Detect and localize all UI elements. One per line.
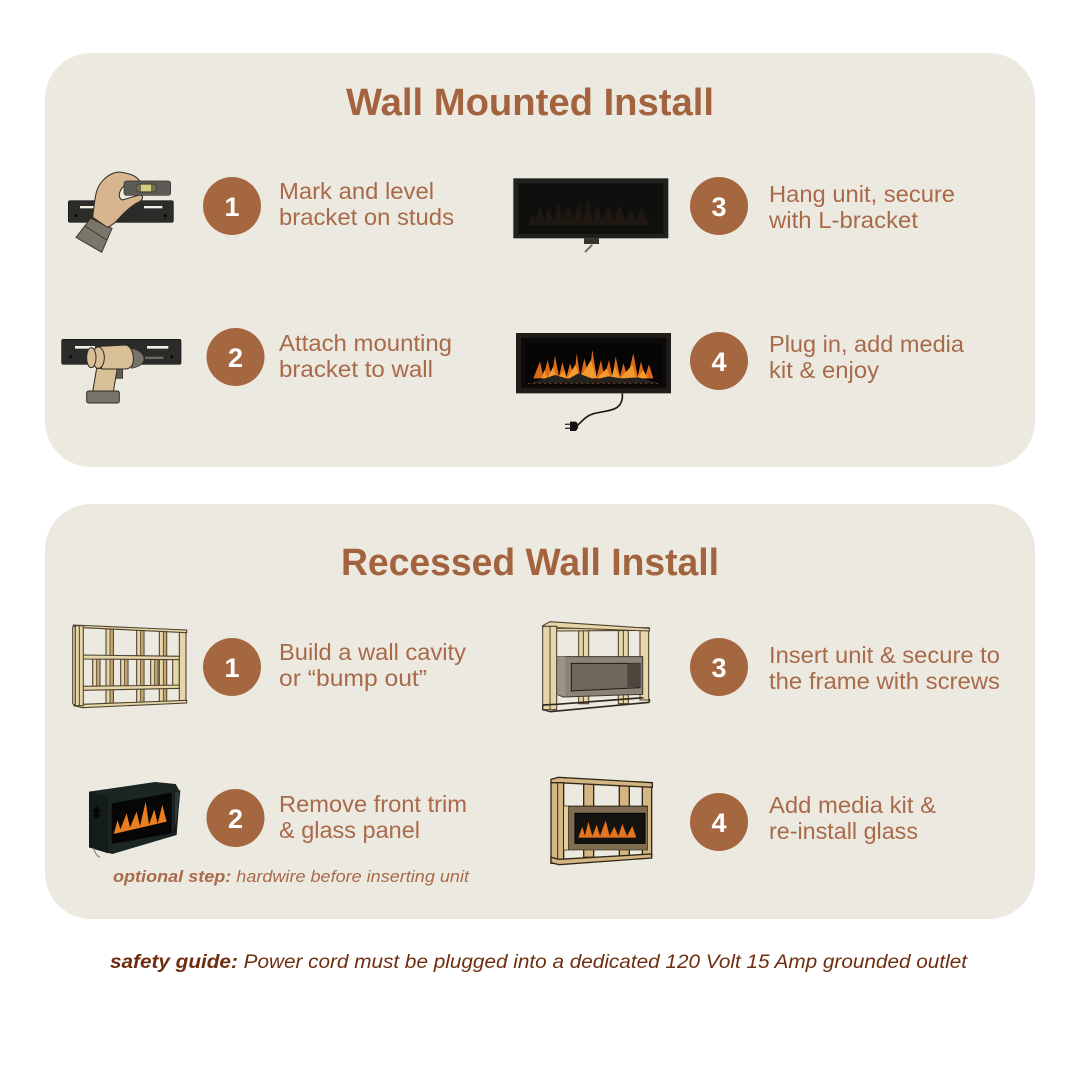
icon: unlit fireplace with l-bracket	[513, 178, 668, 252]
step text: hang unit: with L-bracket	[768, 207, 919, 233]
step text: build a wall cavity	[279, 639, 467, 691]
panel: wall mounted install	[45, 53, 1035, 467]
icon: unit inserted in frame	[543, 622, 649, 712]
panel: recessed wall install	[45, 504, 1035, 919]
step badge: 2	[206, 328, 264, 386]
step text: mark and level: Mark and level	[279, 178, 434, 204]
step text: add media kit: re-install glass	[769, 818, 918, 844]
icon: wall cavity frame	[73, 625, 187, 708]
step badge: 3: 3	[711, 192, 727, 222]
step text: insert unit	[769, 642, 1000, 694]
step text: attach mounting bracket	[279, 330, 452, 382]
step text: plug in: kit & enjoy	[769, 357, 880, 383]
step badge: 1	[203, 177, 261, 235]
step text: mark and level: bracket on studs	[279, 204, 454, 230]
step text: hang unit: Hang unit, secure	[769, 181, 955, 207]
step badge: 1: 1	[224, 653, 240, 683]
step badge: 4	[690, 332, 748, 390]
icon: finished unit in frame	[551, 777, 652, 865]
step text: build a wall cavity: Build a wall cavity	[279, 639, 467, 665]
step text: plug in: Plug in, add media	[769, 331, 964, 357]
icon: fireplace insert with trim removed	[89, 782, 180, 857]
step text: attach mounting bracket: bracket to wall	[279, 356, 433, 382]
step badge: 3	[690, 638, 748, 696]
step text: insert unit: Insert unit & secure to	[769, 642, 1000, 668]
step badge: 3: 3	[711, 653, 727, 683]
step badge: 2	[206, 789, 264, 847]
step badge: 1: 1	[224, 192, 240, 222]
step text: add media kit	[769, 792, 936, 844]
step badge: 4	[690, 793, 748, 851]
step text: hang unit	[768, 181, 955, 233]
step text: add media kit: Add media kit &	[769, 792, 936, 818]
note: optional step: optional step: hardwire before inserting unit	[113, 867, 470, 886]
icon: hand levelling bracket	[68, 172, 173, 252]
step text: mark and level	[279, 178, 454, 230]
step text: remove front trim: Remove front trim	[279, 791, 467, 817]
heading: recessed wall install: Recessed Wall Install	[341, 542, 719, 584]
heading: wall mounted install: Wall Mounted Install	[346, 82, 714, 124]
step badge: 4: 4	[711, 347, 727, 377]
step badge: 2: 2	[228, 343, 243, 373]
step text: build a wall cavity: or “bump out”	[279, 665, 427, 691]
safety guide note: safety guide: Power cord must be plugged into a dedicated 120 Volt 15 Amp grounded outlet	[110, 951, 969, 973]
step text: attach mounting bracket: Attach mounting	[279, 330, 452, 356]
step text: insert unit: the frame with screws	[769, 668, 1000, 694]
icon: drill on bracket	[62, 339, 181, 403]
icon: lit fireplace with power cord	[516, 333, 671, 431]
step badge: 4: 4	[711, 808, 727, 838]
step badge: 2: 2	[228, 804, 243, 834]
step text: plug in	[769, 331, 964, 383]
step text: remove front trim: & glass panel	[279, 817, 420, 843]
step text: remove front trim	[279, 791, 467, 843]
step badge: 3	[690, 177, 748, 235]
step badge: 1	[203, 638, 261, 696]
